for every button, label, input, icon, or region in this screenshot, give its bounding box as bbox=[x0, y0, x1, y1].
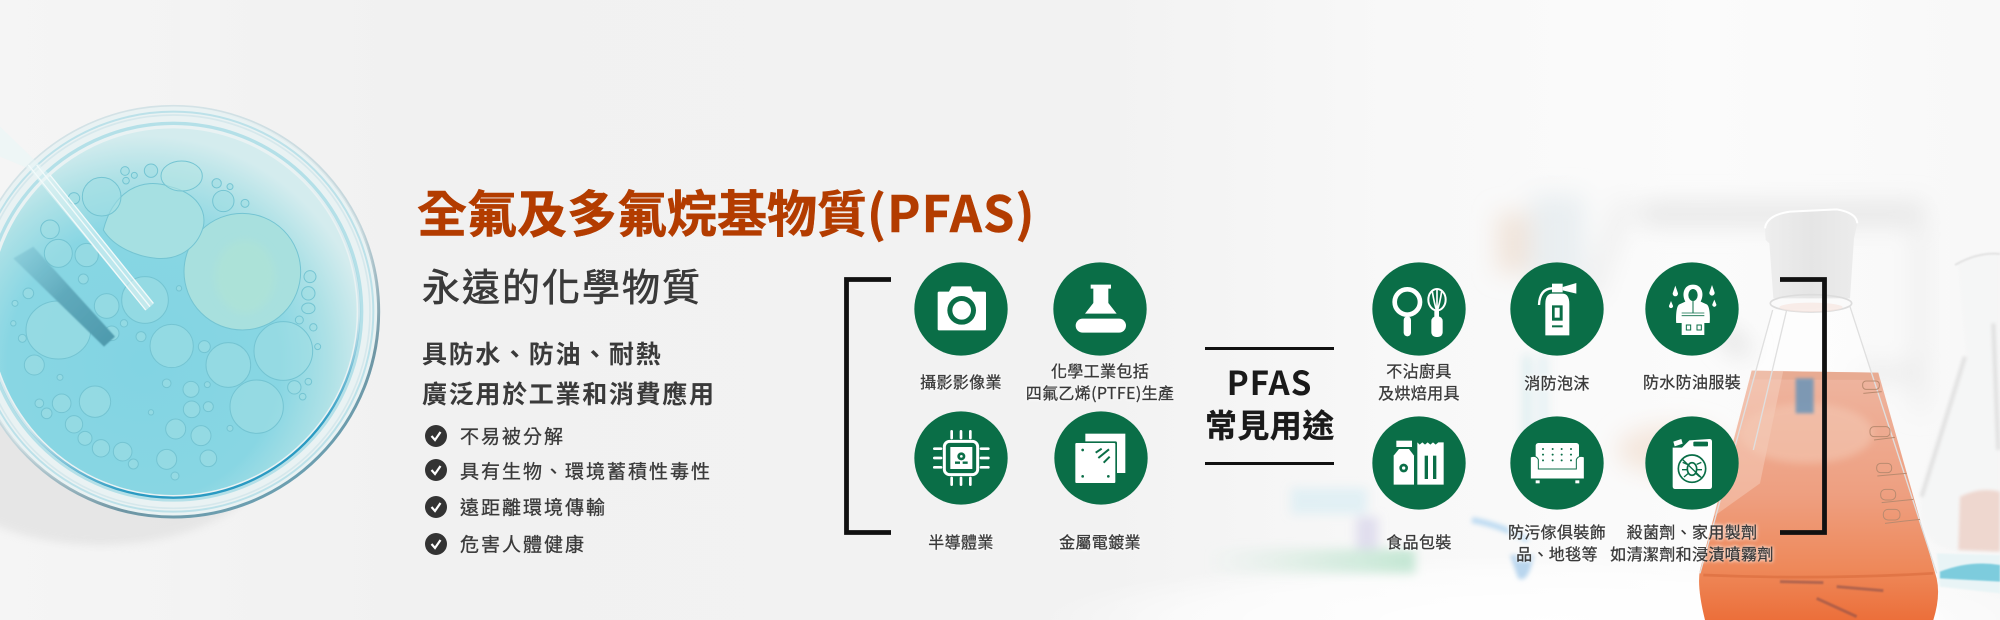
check item 4: 危害人體健康 bbox=[460, 530, 586, 557]
label: biocides: 殺菌劑、家用製劑 bbox=[1627, 519, 1757, 543]
subtitle: 永遠的化學物質 bbox=[422, 257, 702, 312]
icon: fire extinguisher bbox=[1510, 262, 1604, 356]
title: 全氟及多氟烷基物質(PFAS) bbox=[417, 175, 1036, 247]
icon: camera bbox=[914, 262, 1008, 356]
label: furniture: 品、地毯等 bbox=[1516, 540, 1598, 564]
label: cookware: 及烘焙用具 bbox=[1378, 380, 1460, 404]
icon: check 4 bbox=[425, 533, 447, 555]
label: chemical industry bbox=[1026, 358, 1174, 404]
icon: waterproof raincoat bbox=[1645, 262, 1739, 356]
stopper bbox=[1765, 209, 1857, 298]
icon: check 3 bbox=[425, 496, 447, 518]
second flask bbox=[1921, 253, 2000, 550]
label: chemical industry: 化學工業包括 bbox=[1051, 358, 1149, 382]
central heading: PFAS uses: PFAS bbox=[1227, 357, 1312, 405]
label: biocides: 如清潔劑和浸漬噴霧劑 bbox=[1610, 540, 1774, 564]
label: food packaging: 食品包裝 bbox=[1386, 529, 1452, 553]
description text bbox=[422, 335, 716, 411]
checklist icons bbox=[425, 425, 447, 555]
body bbox=[1700, 307, 1940, 620]
check item 1: 不易被分解 bbox=[460, 422, 565, 449]
icon: semiconductor chip bbox=[914, 411, 1008, 505]
icon: non-stick pan and whisk bbox=[1372, 262, 1466, 356]
check item 2: 具有生物、環境蓄積性毒性 bbox=[460, 457, 712, 484]
description text: 具防水、防油、耐熱 bbox=[422, 335, 662, 371]
label: cookware bbox=[1378, 358, 1460, 404]
central heading: PFAS uses: 常見用途 bbox=[1205, 401, 1335, 447]
icon: metal plating plates bbox=[1054, 411, 1148, 505]
icon: chemical flask bbox=[1053, 262, 1147, 356]
central heading: PFAS uses bbox=[1205, 347, 1334, 465]
label: metal plating: 金屬電鍍業 bbox=[1059, 529, 1141, 553]
label: chemical industry: 四氟乙烯(PTFE)生產 bbox=[1026, 380, 1174, 404]
icon: food packaging bbox=[1372, 416, 1466, 510]
icon: check 1 bbox=[425, 425, 447, 447]
label: furniture bbox=[1506, 519, 1606, 564]
label: furniture: 防污傢俱裝飾 bbox=[1508, 519, 1606, 543]
left bracket bbox=[844, 277, 891, 535]
icon: check 2 bbox=[425, 459, 447, 481]
description text: 廣泛用於工業和消費應用 bbox=[422, 375, 716, 411]
label: fire foam: 消防泡沫 bbox=[1524, 370, 1590, 394]
label: waterproof clothing: 防水防油服裝 bbox=[1643, 369, 1741, 393]
icon: sofa bbox=[1510, 416, 1604, 510]
label: semiconductor: 半導體業 bbox=[928, 529, 994, 553]
icon: pesticide canister bbox=[1645, 416, 1739, 510]
label: cookware: 不沾廚具 bbox=[1386, 358, 1452, 382]
label: photography: 攝影影像業 bbox=[920, 369, 1002, 393]
right bracket bbox=[1780, 277, 1827, 535]
check item 3: 遠距離環境傳輸 bbox=[460, 493, 607, 520]
label: biocides bbox=[1610, 519, 1776, 564]
